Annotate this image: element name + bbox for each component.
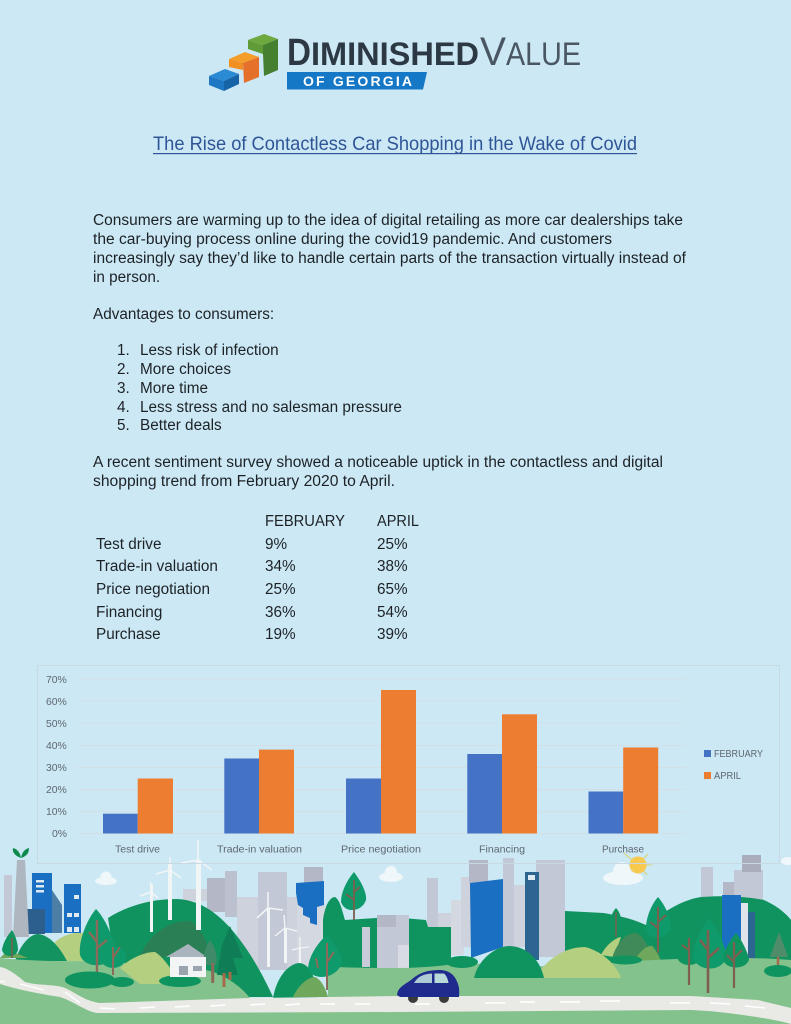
data table: Purchase [96, 626, 161, 643]
chart: February vs April by category [38, 666, 780, 864]
advantages list: 1. [117, 342, 130, 359]
logo wordmark: IMINISHED [311, 36, 479, 72]
y axis labels: 0% [52, 829, 67, 840]
data table: 38% [377, 558, 408, 575]
legend: FEBRUARY [714, 749, 763, 760]
advantages list: 3. [117, 380, 130, 397]
data table: 36% [265, 604, 296, 621]
data table: 25% [265, 581, 296, 598]
February bars [103, 754, 623, 834]
data table: 39% [377, 626, 408, 643]
x axis labels: Test drive [115, 844, 160, 856]
clouds [95, 857, 791, 885]
road [0, 967, 791, 1024]
ground [0, 958, 791, 1024]
advantages list: 5. [117, 417, 130, 434]
intro paragraph: increasingly say they’d like to handle certain parts of the transaction virtually instead of [93, 250, 687, 267]
advantages list: 2. [117, 361, 130, 378]
bushes [65, 965, 791, 988]
x axis labels: Financing [479, 844, 525, 856]
y axis labels: 20% [46, 785, 67, 796]
data table: Price negotiation [96, 581, 210, 598]
gridlines [77, 679, 685, 834]
icon: stacked cubes [209, 34, 278, 91]
survey paragraph [93, 454, 663, 490]
data table: Test drive [96, 536, 161, 553]
April bars [138, 690, 658, 834]
survey paragraph: shopping trend from February 2020 to April. [93, 473, 395, 490]
logo wordmark: D [287, 32, 311, 74]
advantages list: More time [140, 380, 208, 397]
y axis labels: 70% [46, 675, 67, 686]
x axis labels: Trade-in valuation [217, 844, 302, 856]
intro paragraph: Consumers are warming up to the idea of digital retailing as more car dealerships take [93, 212, 683, 229]
grey buildings in front of the hills [362, 915, 409, 970]
advantages list [117, 342, 402, 434]
x axis labels [115, 844, 644, 856]
y axis labels [46, 675, 67, 840]
survey paragraph: A recent sentiment survey showed a noticeable uptick in the contactless and digital [93, 454, 663, 471]
y axis labels: 50% [46, 719, 67, 730]
data table: Financing [96, 604, 162, 621]
advantages list: More choices [140, 361, 231, 378]
advantages list: Less risk of infection [140, 342, 279, 359]
wind turbines [140, 840, 309, 967]
data table: 54% [377, 604, 408, 621]
factory chimney with leaves [13, 848, 29, 937]
advantages list: 4. [117, 399, 130, 416]
y axis labels: 30% [46, 763, 67, 774]
intro paragraph: in person. [93, 269, 160, 286]
data table: 65% [377, 581, 408, 598]
foreground mounds [120, 946, 642, 998]
data table [96, 513, 419, 643]
sun [624, 853, 652, 875]
landscape illustration [0, 840, 791, 1024]
trees [2, 872, 788, 993]
y axis labels: 10% [46, 807, 67, 818]
logo wordmark: ALUE [506, 36, 581, 72]
data table: 25% [377, 536, 408, 553]
y axis labels: 60% [46, 697, 67, 708]
logo wordmark: V [480, 30, 506, 74]
house [166, 944, 206, 977]
y axis labels: 40% [46, 741, 67, 752]
data table: FEBRUARY [265, 513, 345, 530]
x axis labels: Purchase [602, 844, 644, 856]
data table: Trade-in valuation [96, 558, 218, 575]
advantages heading: Advantages to consumers: [93, 306, 274, 323]
data table: APRIL [377, 513, 419, 530]
mounds and small hills [0, 933, 661, 962]
x axis labels: Price negotiation [341, 844, 421, 856]
intro paragraph: the car-buying process online during the covid19 pandemic. And customers [93, 231, 612, 248]
grey buildings [4, 855, 763, 970]
logo banner: of Georgia: OF GEORGIA [303, 73, 412, 89]
data table: 34% [265, 558, 296, 575]
car [397, 970, 459, 1003]
title: The Rise of Contactless Car Shopping in the Wake of Covid [153, 133, 637, 155]
data table: 19% [265, 626, 296, 643]
big hills [108, 896, 791, 997]
advantages list: Better deals [140, 417, 222, 434]
logo: Diminished Value of Georgia [209, 30, 581, 91]
legend [704, 749, 763, 782]
intro paragraph [93, 212, 687, 286]
legend: APRIL [714, 771, 741, 782]
blue buildings [27, 872, 755, 960]
data table: 9% [265, 536, 288, 553]
advantages list: Less stress and no salesman pressure [140, 399, 402, 416]
logo wordmark [287, 30, 581, 74]
